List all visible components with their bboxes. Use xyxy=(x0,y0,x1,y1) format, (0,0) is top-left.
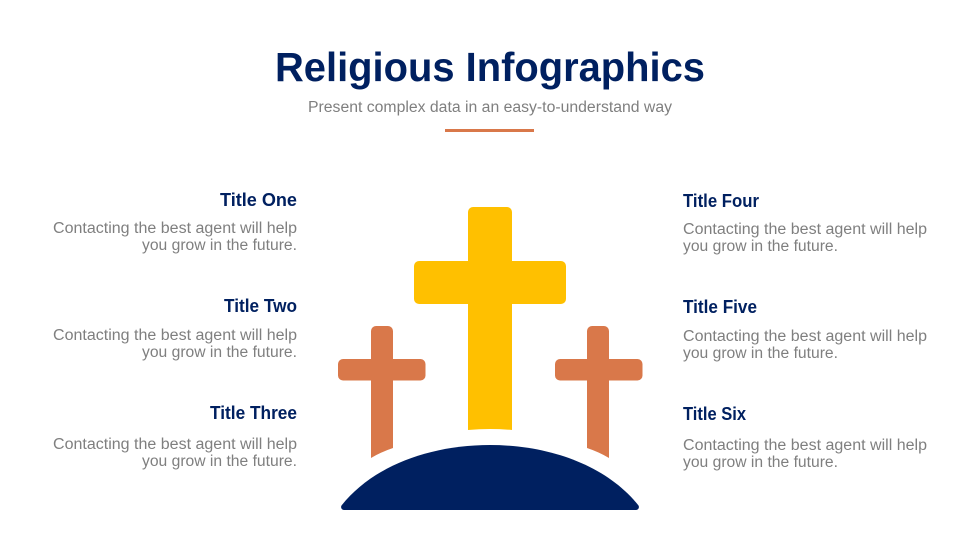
title underline xyxy=(445,129,534,132)
title: Religious Infographics xyxy=(275,44,705,90)
text block: Title Four xyxy=(683,190,927,255)
text block: Title Three xyxy=(53,402,297,470)
icon: three crosses on a hill xyxy=(338,207,642,510)
text block: Title Three: Contacting the best agent will help xyxy=(53,436,297,453)
text block: Title One xyxy=(53,189,297,254)
icon: center yellow cross xyxy=(414,207,566,430)
text block: Title Three: Title Three xyxy=(210,402,297,423)
subtitle: Present complex data in an easy-to-understand way xyxy=(308,99,672,116)
text block: Title Five: Title Five xyxy=(683,296,757,317)
text block: Title Two: Title Two xyxy=(224,295,297,316)
text block: Title One: Title One xyxy=(220,189,297,210)
text block: Title Six: Title Six xyxy=(683,403,747,424)
text block: Title Five xyxy=(683,296,927,362)
text block: Title Three: you grow in the future. xyxy=(142,453,297,470)
text block: Title Six xyxy=(683,403,927,471)
text block: Title Five: you grow in the future. xyxy=(683,345,838,362)
text block: Title Four: Title Four xyxy=(683,190,759,211)
icon: right orange cross xyxy=(555,326,642,458)
text block: Title Six: Contacting the best agent will help xyxy=(683,437,927,454)
icon: navy hill xyxy=(341,445,639,510)
text block: Title Two: you grow in the future. xyxy=(142,344,297,361)
text block: Title Four: Contacting the best agent will help xyxy=(683,221,927,238)
text block: Title One: Contacting the best agent will help xyxy=(53,220,297,237)
text block: Title One: you grow in the future. xyxy=(142,237,297,254)
text block: Title Six: you grow in the future. xyxy=(683,454,838,471)
text block: Title Two xyxy=(53,295,297,361)
text block: Title Five: Contacting the best agent will help xyxy=(683,328,927,345)
icon: left orange cross xyxy=(338,326,426,458)
text block: Title Four: you grow in the future. xyxy=(683,238,838,255)
text block: Title Two: Contacting the best agent will help xyxy=(53,327,297,344)
